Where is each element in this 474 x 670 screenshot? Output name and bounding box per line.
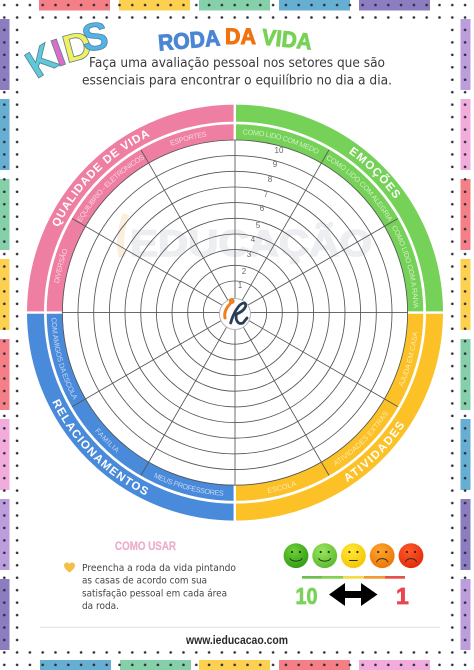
divider line [40,626,440,628]
label: inner sector names: COMO LIDO COM A RAIVA [392,226,418,308]
subtitle text [82,55,392,88]
logo: KIDS: K [18,36,65,87]
label: outer sector names [52,130,404,495]
label: inner sector names: ESPORTES [170,132,206,146]
label: inner sector names: COMO LIDO COM ALEGRIA [326,156,392,222]
label: inner sector names: FAMILIA [95,428,118,453]
logo: KIDS: S [79,14,111,61]
face: happy [312,543,337,568]
text: instructions [82,563,236,612]
grid: spokes [62,140,408,485]
grid: rings [62,140,408,485]
subtitle text: Faça uma avaliação pessoal nos setores que são [89,55,385,71]
text: instructions: da roda. [82,601,119,612]
scale numbers 1 to 10: 2 [242,267,247,276]
logo: KIDS [18,14,111,87]
label: outer sector names: EMOÇÕES [349,146,400,198]
label: inner sector names: ESCOLA [268,481,297,493]
icon: heart bullet [64,562,75,572]
label: inner sector names: MEUS PROFESSORES [154,472,224,496]
watermark: ieducação [121,214,372,264]
scale numbers 1 to 10: 10 [275,146,284,155]
scale numbers 1 to 10: 8 [268,175,273,184]
text: instructions: Preencha a roda da vida pintando [82,563,236,574]
chart: roda da vida wheel [27,104,443,521]
title: Roda da Vida: RODA [157,25,221,56]
label: outer sector names: RELACIONAMENTOS [52,398,148,495]
text: instructions: satisfação pessoal em cada área [82,588,227,600]
logo: KIDS: D [58,23,97,72]
title: Roda da Vida [157,24,313,56]
title: Roda da Vida: DA [225,24,256,49]
scale numbers 1 to 10: 9 [273,160,278,169]
scale numbers 1 to 10: 5 [256,221,261,230]
label: inner sector names: COM AMIGOS DA ESCOLA [52,318,77,400]
footer: website: www.ieducacao.com [185,635,288,647]
text: instructions: as casas de acordo com sua [82,576,207,586]
scale numbers 1 to 10: 1 [238,281,243,290]
icons: satisfaction faces [284,543,423,568]
label: inner sector names: ATIVIDADES EXTRAS [334,411,388,466]
arrow: double-headed [329,583,378,606]
face: neutral [341,543,366,568]
scale numbers 1 to 10: 4 [251,235,256,244]
logo: KIDS: I [46,31,71,75]
label: inner sector names: DIVERSÃO [54,249,68,283]
scale value: 1: 1 [396,583,409,609]
label: inner sector names: EQUILIBRIO - ELETRONICOS [77,155,144,222]
scale numbers 1 to 10: 3 [247,250,252,259]
icon: center logo [220,298,250,330]
scale colour bar [302,576,405,579]
title: Roda da Vida: VIDA [261,24,313,55]
scale value: 10: 10 [296,583,318,609]
face: sad [370,543,395,568]
band: outer and inner quarter rings [22,100,448,525]
label: outer sector names: ATIVIDADES [345,422,404,482]
subtitle text: essenciais para encontrar o equilíbrio no dia a dia. [82,72,392,88]
label: inner sector names: COMO LIDO COM MEDO [243,129,319,154]
face: very sad [399,543,423,568]
label: inner sector names [52,129,418,496]
face: very happy [284,543,308,568]
scale numbers 1 to 10: 6 [260,204,265,213]
scale numbers 1 to 10 [238,146,284,290]
scale numbers 1 to 10: 7 [264,190,269,199]
label: inner sector names: AJUDA EM CASA [399,332,418,387]
label: outer sector names: QUALIDADE DE VIDA [52,130,150,226]
heading: Como usar: COMO USAR [115,541,177,553]
watermark: ieducação: EDUCAÇÃO [130,222,372,264]
